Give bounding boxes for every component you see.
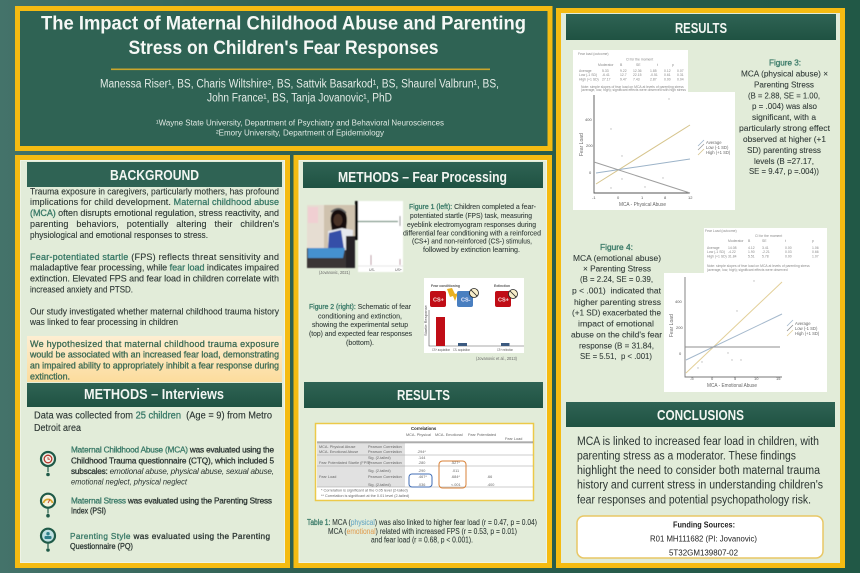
figure 3: physical abuse interaction plot: B: [620, 63, 623, 67]
CS+ extinction stimulus: CS+: [498, 298, 509, 304]
text: maternal childhood abuse measure: emotional neglect, physical neglect: [71, 478, 188, 487]
figure 4: emotional abuse interaction plot: 200: [676, 325, 683, 330]
figure 4: emotional abuse interaction plot: 0.00: [785, 246, 792, 250]
figure 3: physical abuse interaction plot: -0.51: [650, 73, 658, 77]
figure 4: emotional abuse interaction plot: 1.90: [748, 250, 755, 254]
figure 3: physical abuse interaction plot: Moderator: [598, 63, 614, 67]
figure 3: physical abuse interaction plot: SE: [636, 63, 641, 67]
figure 4: emotional abuse interaction plot: 400: [675, 299, 682, 304]
caption: figure 3: [739, 58, 831, 176]
text: background paragraphs: Our study investigated whether maternal childhood trauma history: [30, 306, 279, 316]
title: Stress on Children's Fear Responses: [128, 37, 439, 59]
text: maternal stress measure: Maternal Stress was evaluated using the Parenting Stress: [71, 496, 272, 505]
figure 3: physical abuse interaction plot: (average, low, high); significant effects were observed with high stress: [581, 88, 686, 92]
figure 4: emotional abuse interaction plot: 31.84: [728, 254, 737, 258]
panel: results and conclusions: [558, 10, 842, 566]
figure 3: physical abuse interaction plot: 0.61: [664, 73, 671, 77]
figure 3: physical abuse interaction plot: 1: [641, 195, 644, 200]
callout: funding sources: Funding Sources:: [673, 519, 735, 529]
caption: figure 2: (top) and expected fear responses: [309, 329, 412, 338]
figure 3: physical abuse interaction plot: Fear load (outcome): [578, 52, 609, 56]
heading: methods interviews: [27, 383, 282, 407]
figure 4: emotional abuse interaction plot: 5.78: [762, 254, 769, 258]
figure 3: physical abuse interaction plot: p: [672, 63, 674, 67]
icon: no shock: [470, 288, 478, 298]
table 1: correlations: MCA- Physical Abuse: [319, 445, 356, 449]
heading: background: [27, 162, 282, 187]
table 1: correlations: Correlations: [411, 426, 437, 431]
figure 4: emotional abuse interaction plot: Average: [707, 246, 720, 250]
table 1: correlations: Pearson Correlation: [368, 450, 402, 454]
text: background paragraphs: extinction. Elevated FPS and fear load in children correlate with: [30, 274, 279, 284]
text: background paragraphs: Fear-potentiated startle (FPS) reflects threat sensitivity and: [30, 252, 279, 262]
text: parenting style measure: Parenting Style was evaluated using the Parenting: [70, 532, 270, 541]
text: sample description: Data was collected from 25 children (Age = 9) from Metro: [34, 411, 272, 422]
caption: figure 4: [571, 242, 662, 361]
caption: figure 2: Figure 2 (right): Schematic of fear: [309, 302, 411, 311]
caption: figure 1: differential fear conditioning with a reinforced: [403, 228, 541, 238]
figure 3: physical abuse interaction plot: 0.31: [677, 73, 684, 77]
figure 1: startle task photo and traces: [307, 201, 403, 275]
figure 4: emotional abuse interaction plot: 15: [776, 376, 781, 381]
text: conclusions: fear responses and potential psychopathology risk.: [577, 494, 811, 506]
figure 3: physical abuse interaction plot: High (+1 SD): [579, 78, 599, 82]
caption: figure 4: response (B = 31.84,: [579, 341, 654, 351]
callout: hypothesis: an impaired ability to appropriately inhibit a fear response during: [30, 361, 279, 371]
caption: table 1: Table 1: MCA (physical) was also linked to higher fear load (r = 0.47, p = 0.04): [307, 518, 537, 527]
CS+ stimulus: CS+: [433, 298, 444, 304]
callout: funding sources: 5T32GM139807-02: [669, 548, 738, 558]
heading: results right: RESULTS: [675, 20, 727, 37]
figure 2: fear conditioning schematic: [423, 278, 524, 353]
caption: figure 3: SE = 9.47, p =.004)): [749, 166, 819, 176]
table 1: correlations: .144: [418, 456, 425, 460]
table 1: correlations: .011: [452, 469, 459, 473]
caption: table 1: MCA (emotional) related with increased FPS (r = 0.53, p = 0.01): [328, 527, 517, 536]
legend: figure 3: Average: [706, 140, 722, 145]
text: background paragraphs: parenting behaviors, potentially altering their children's: [30, 219, 280, 229]
figure 3: physical abuse interaction plot: 0.00: [664, 78, 671, 82]
caption: figure 3: Figure 3:: [769, 58, 801, 68]
legend: figure 3: [698, 140, 731, 155]
text: background paragraphs: Trauma exposure in caregivers, particularly mothers, has profound: [30, 187, 279, 197]
table 1: correlations: .684*: [451, 475, 460, 479]
panel: methods fear processing and results: [296, 10, 842, 566]
caption: table 1: [307, 518, 537, 544]
figure 4: emotional abuse interaction plot: Fear Load: [669, 314, 675, 337]
figure 4: emotional abuse interaction plot: 0.03: [785, 250, 792, 254]
caption: figure 4: impact of emotional: [578, 319, 654, 329]
figure 3: physical abuse interaction plot: Average: [579, 69, 592, 73]
figure 4: emotional abuse interaction plot: 10: [754, 376, 759, 381]
figure 4: emotional abuse interaction plot: CI for the moment: [755, 234, 782, 238]
figure 4: emotional abuse interaction plot: 0.66: [812, 250, 819, 254]
table 1: correlations: .280: [418, 461, 425, 465]
heading: methods fear processing: [303, 162, 543, 188]
bar chart: expected fear responses: CS+ extinction: [497, 347, 513, 352]
text: maternal childhood abuse measure: subscales: emotional abuse, physical abuse, sexual abuse,: [71, 467, 274, 476]
figure 3: physical abuse interaction plot: 0: [617, 195, 620, 200]
caption: figure 4: MCA (emotional abuse): [573, 253, 661, 263]
caption: figure 3: particularly strong effect: [739, 123, 831, 133]
figure 4: emotional abuse interaction plot: B: [748, 239, 751, 243]
figure 4: emotional abuse interaction plot: 5.51: [748, 254, 755, 258]
heading: methods interviews: METHODS – Interviews: [84, 386, 224, 403]
figure 4: emotional abuse interaction plot: -4.22: [728, 250, 736, 254]
callout: hypothesis: extinction.: [30, 372, 70, 382]
panel: background and interviews: [18, 158, 288, 566]
table 1: correlations: <.001: [451, 483, 461, 487]
caption: figure 2: showing the experimental setup: [312, 320, 408, 329]
figure 2: fear conditioning schematic: Fear conditioning: [431, 283, 460, 288]
caption: figure 4: (B = 2.24, SE = 0.39,: [580, 274, 653, 284]
table 1: correlations: Fear Potentiated Startle (FPS): [319, 461, 371, 465]
figure 4: emotional abuse interaction plot: 1.07: [812, 254, 819, 258]
caption: figure 4: Figure 4:: [600, 242, 633, 252]
caption: table 1: and fear load (r = 0.68, p < 0.001).: [371, 536, 473, 544]
table 1: correlations: ** Correlation is significant at the 0.01 level (2-tailed): [321, 494, 410, 498]
bar chart: expected fear responses: CS+ acquisition: [432, 347, 450, 352]
figure 3: physical abuse interaction plot: 7.43: [633, 78, 640, 82]
table 1: correlations: Pearson Correlation: [368, 445, 402, 449]
figure 1: startle task photo and traces: (Jovanovic, 2021): [319, 270, 350, 275]
figure 2: fear conditioning schematic: Extinction: [494, 283, 510, 288]
text: background paragraphs: [29, 187, 279, 327]
authors: Manessa Riser¹, BS, Charis Wiltshire², BS, Sattvik Basarkod¹, BS, Shaurel Valbrun¹, BS,: [100, 78, 499, 90]
callout: hypothesis: We hypothesized that maternal childhood trauma exposure: [30, 339, 279, 349]
text: parenting style measure: Questionnaire (PQ): [70, 542, 133, 551]
icon: parenting style: [41, 529, 55, 552]
caption: figure 1: followed by extinction learning.: [423, 245, 520, 254]
caption: figure 3: significant, with a: [752, 112, 816, 122]
figure 4: emotional abuse interaction plot: (average, low, high); significant effects were observed: [707, 268, 788, 272]
caption: figure 4: abuse on the child's fear: [571, 330, 662, 340]
caption: figure 3: p = .004) was also: [752, 101, 817, 111]
figure 3: physical abuse interaction plot: 0.04: [677, 78, 684, 82]
figure 3: physical abuse interaction plot: CI for the moment: [626, 58, 653, 62]
table 1: correlations: .294*: [417, 450, 426, 454]
title rule: [111, 68, 490, 70]
table 1: correlations: Fear Potentiated: [468, 433, 496, 437]
figure 3: physical abuse interaction plot: Note: simple slopes of fear load on MCA at levels of parenting stress: [581, 85, 684, 89]
figure 1: startle task photo and traces: US-: [369, 267, 376, 272]
text: maternal childhood abuse measure: Maternal Childhood Abuse (MCA) was evaluated using the: [71, 446, 274, 455]
figure 4: emotional abuse interaction plot: 14.08: [728, 246, 737, 250]
figure 3: physical abuse interaction plot: t: [657, 63, 658, 67]
table 1: correlations: Sig. (2-tailed): [368, 469, 391, 473]
table 1: correlations: MCA- Emotional Abuse: [319, 450, 358, 454]
figure 3: physical abuse interaction plot: -1: [592, 195, 596, 200]
affiliations: ¹Wayne State University, Department of Psychiatry and Behavioral Neurosciences: [156, 118, 444, 128]
figure 4: emotional abuse interaction plot: Fear Load (outcome): [705, 229, 737, 233]
table 1: correlations: Fear Load: [319, 475, 336, 479]
caption: figure 1: [403, 202, 541, 254]
caption: figure 1: eyeblink electromyogram responses during: [407, 220, 536, 229]
figure 3: physical abuse interaction plot: 9.22: [620, 69, 627, 73]
caption: figure 3: levels (B =27.17,: [754, 156, 814, 166]
bar chart: expected fear responses: CS- acquisition: [453, 347, 470, 352]
legend: figure 3: High (+1 SD): [706, 150, 731, 155]
figure 3: physical abuse interaction plot: 1.85: [650, 69, 657, 73]
text: parenting style measure: [70, 532, 270, 551]
caption: figure 1: Figure 1 (left): Children completed a fear-: [409, 202, 536, 211]
legend: figure 4: High (+1 SD): [795, 331, 820, 336]
callout: hypothesis: would be associated with an increased fear load, demonstrating: [29, 350, 279, 360]
text: maternal stress measure: [71, 496, 272, 515]
heading: results middle: RESULTS: [397, 387, 450, 404]
caption: figure 3: MCA (physical abuse) ×: [741, 68, 828, 78]
figure 3: physical abuse interaction plot: 5.33: [602, 69, 609, 73]
authors: John France¹, BS, Tanja Jovanovic¹, PhD: [207, 92, 392, 104]
callout: funding sources: R01 MH111682 (PI: Jovanovic): [650, 534, 757, 544]
text: conclusions: MCA is linked to increased fear load in children, with: [577, 436, 819, 448]
figure 4: emotional abuse interaction plot: -2.21: [762, 250, 770, 254]
figure 4: emotional abuse interaction plot: p: [812, 239, 814, 243]
figure 3: physical abuse interaction plot: 12.36: [633, 69, 642, 73]
caption: figure 3: observed at higher (+1: [743, 134, 826, 144]
text: background paragraphs: implications for child development. Maternal childhood abuse: [30, 197, 279, 207]
table 1: correlations: .467*: [418, 475, 427, 479]
text: background paragraphs: physiological and emotional responses to stress.: [30, 230, 208, 240]
text: sample description: [34, 411, 272, 434]
table 1: correlations: .400: [487, 483, 494, 487]
citation: figure 2: (Jovanovic et al., 2013): [476, 356, 517, 361]
legend: figure 3: Low (-1 SD): [706, 145, 729, 150]
table 1: correlations: Sig. (2-tailed): [368, 483, 391, 487]
affiliations: [156, 118, 444, 138]
heading: conclusions: CONCLUSIONS: [657, 407, 744, 424]
figure 3: physical abuse interaction plot: [573, 50, 735, 210]
text: background paragraphs: increased anxiety and PTSD.: [30, 285, 133, 295]
figure 4: emotional abuse interaction plot: MCA - Emotional Abuse: [707, 383, 757, 389]
figure 4: emotional abuse interaction plot: Low (-1 SD): [707, 250, 725, 254]
table 1: correlations: MCA- Physical: [406, 433, 431, 437]
heading: results right: [566, 14, 836, 40]
text: maternal childhood abuse measure: Childhood Trauma questionnaire (CTQ), which included 5: [71, 456, 274, 465]
legend: figure 4: Low (-1 SD): [795, 326, 818, 331]
table 1: correlations: .290: [418, 469, 425, 473]
figure 3: physical abuse interaction plot: 400: [585, 117, 592, 122]
caption: figure 4: (+1 SD) exacerbated the: [572, 308, 661, 318]
text: maternal stress measure: Index (PSI): [71, 506, 106, 515]
authors: [100, 78, 499, 104]
text: background paragraphs: (MCA) often disrupts emotional regulation, stress reactivity, and: [30, 208, 279, 218]
title: The Impact of Maternal Childhood Abuse and Parenting: [41, 12, 526, 34]
bar chart: expected fear responses: Startle Response: [423, 305, 428, 336]
figure 4: emotional abuse interaction plot: 5: [734, 376, 737, 381]
figure 3: physical abuse interaction plot: 200: [586, 143, 593, 148]
heading: conclusions: [566, 402, 835, 427]
figure 3: physical abuse interaction plot: 9.47: [620, 78, 627, 82]
figure 3: physical abuse interaction plot: MCA - Physical Abuse: [619, 202, 666, 208]
callout: funding sources: [577, 516, 823, 558]
table 1: correlations: Fear Load: [505, 437, 522, 441]
affiliations: ²Emory University, Department of Epidemiology: [216, 129, 384, 138]
panel: title: [18, 8, 550, 148]
caption: figure 1: potentiated startle (FPS) task, measuring: [410, 211, 532, 220]
figure 4: emotional abuse interaction plot: 0: [679, 351, 682, 356]
legend: figure 4: Average: [795, 321, 811, 326]
table 1: correlations: .036: [418, 483, 425, 487]
icon: maternal childhood abuse clock: [41, 452, 55, 476]
table 1: correlations: [307, 424, 537, 544]
table 1: correlations: .527*: [451, 461, 460, 465]
figure 3: physical abuse interaction plot: 2.87: [650, 78, 657, 82]
text: background paragraphs: maladaptive fear processing, while fear load indicates impaired: [30, 263, 279, 273]
title: [41, 12, 526, 59]
icon: maternal stress gauge: [41, 494, 55, 518]
heading: results middle: [304, 382, 543, 408]
table 1: correlations: Pearson Correlation: [368, 475, 402, 479]
legend: figure 4: [787, 320, 820, 336]
table 1: correlations: Sig. (2-tailed): [368, 456, 391, 460]
caption: figure 2: conditioning and extinction,: [318, 311, 402, 320]
table 1: correlations: Pearson Correlation: [368, 461, 402, 465]
bar chart: expected fear responses: [423, 305, 524, 352]
figure 4: emotional abuse interaction plot: 0.00: [785, 254, 792, 258]
highlight: emotional abuse correlations: [439, 461, 466, 488]
figure 3: physical abuse interaction plot: 0.07: [677, 69, 684, 73]
figure 4: emotional abuse interaction plot: Note: simple slopes of fear load on MCA at levels of parenting stress: [707, 264, 810, 268]
figure 4: emotional abuse interaction plot: High (+1 SD): [707, 254, 727, 258]
heading: methods fear processing: METHODS – Fear Processing: [338, 169, 507, 186]
figure 3: physical abuse interaction plot: 27.17: [602, 78, 611, 82]
figure 4: emotional abuse interaction plot: 0: [711, 376, 714, 381]
figure 1: startle task photo and traces: US+: [395, 267, 403, 272]
figure 3: physical abuse interaction plot: Fear Load: [579, 133, 585, 156]
text: conclusions: highlight the need to consider both maternal trauma: [577, 465, 821, 477]
figure 4: emotional abuse interaction plot: 1.06: [812, 246, 819, 250]
caption: figure 4: higher parenting stress: [574, 297, 661, 307]
figure 4: emotional abuse interaction plot: 3.41: [762, 246, 769, 250]
caption: figure 4: SE = 5.51, p < .001): [580, 351, 652, 361]
table 1: correlations: * Correlation is significant at the 0.05 level (2-tailed): [321, 488, 408, 492]
text: conclusions: [577, 436, 823, 506]
text: conclusions: parenting stress as a moderator. These findings: [577, 451, 796, 463]
caption: figure 3: (B = 2.88, SE = 1.00,: [748, 91, 820, 101]
figure 3: physical abuse interaction plot: 0: [589, 170, 592, 175]
callout: hypothesis: [27, 336, 282, 382]
icon: shock bolt: [447, 288, 458, 301]
icon: no shock extinction: [508, 290, 518, 298]
figure 4: emotional abuse interaction plot: 4.12: [748, 246, 755, 250]
heading: background: BACKGROUND: [110, 167, 199, 184]
highlight: physical abuse correlation: [409, 474, 432, 487]
figure 4: emotional abuse interaction plot: Moderator: [728, 239, 744, 243]
figure 4: emotional abuse interaction plot: -5: [690, 376, 694, 381]
table 1: correlations: .66: [487, 475, 492, 479]
caption: figure 4: × Parenting Stress: [583, 264, 651, 274]
caption: figure 3: Parenting Stress: [754, 80, 814, 90]
text: sample description: Detroit area: [34, 423, 81, 434]
table 1: correlations: MCA- Emotional: [435, 433, 463, 437]
figure 4: emotional abuse interaction plot: SE: [762, 239, 767, 243]
text: conclusions: history and current stress in understanding children's: [577, 479, 823, 491]
caption: figure 4: p < .001) indicated that: [572, 286, 662, 296]
figure 3: physical abuse interaction plot: 12.7: [620, 73, 627, 77]
figure 4: emotional abuse interaction plot: [664, 228, 827, 392]
figure 3: physical abuse interaction plot: 0.12: [664, 69, 671, 73]
figure 3: physical abuse interaction plot: Low (-1 SD): [579, 73, 597, 77]
figure 3: physical abuse interaction plot: -6.41: [602, 73, 610, 77]
figure 3: physical abuse interaction plot: 22.15: [633, 73, 642, 77]
caption: figure 2: [309, 302, 412, 347]
figure 3: physical abuse interaction plot: 8: [664, 195, 667, 200]
caption: figure 1: (CS+) and non-reinforced (CS-) stimulus,: [412, 237, 532, 246]
CS- stimulus: CS-: [461, 298, 471, 304]
text: background paragraphs: was linked to fear processing in children: [29, 317, 178, 327]
figure 4: emotional abuse interaction plot: t: [785, 239, 786, 243]
caption: figure 2: (bottom).: [346, 338, 374, 347]
caption: figure 3: SD) parenting stress: [747, 145, 821, 155]
figure 3: physical abuse interaction plot: 12: [688, 195, 693, 200]
text: maternal childhood abuse measure: [71, 446, 274, 487]
